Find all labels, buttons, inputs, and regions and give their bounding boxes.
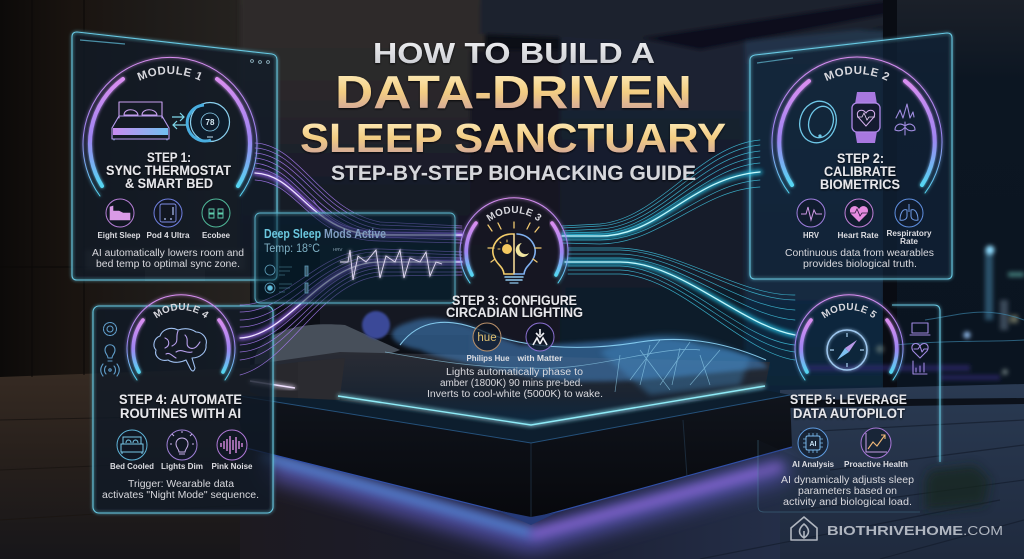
flow lines: purple from modules 1 and 4 [240,143,462,375]
headboard [320,245,500,335]
description: activity and biological load. [783,497,912,508]
description [92,248,244,270]
description: AI dynamically adjusts sleep [781,475,914,486]
item: Pod 4 Ultra [146,199,190,240]
module label: MODULE 2 [824,66,890,81]
module label: MODULE 3 [486,206,542,222]
item: AI Analysis: AI [810,441,817,448]
item: HRV: HRV [803,231,820,240]
title line 2: DATA-DRIVEN [335,66,692,118]
panel: module 1 [68,29,280,283]
under-bed glow [265,452,790,552]
step heading [106,150,232,191]
description: bed temp to optimal sync zone. [96,259,240,270]
glass frame [892,305,940,462]
panel: module 2 [747,30,955,282]
item: Eight Sleep: Eight Sleep [98,231,141,240]
step heading: CALIBRATE [824,164,896,179]
step heading: STEP 4: AUTOMATE [119,392,242,407]
progress arc [460,198,568,283]
item: Philips Hue [466,323,510,363]
status rows [265,265,308,293]
description: amber (1800K) 90 mins pre-bed. [440,378,583,389]
icon: thermostat [187,102,230,142]
panel: module 5 [758,292,943,512]
description: activates "Night Mode" sequence. [102,490,259,501]
progress arc [127,295,235,380]
title block [300,38,726,185]
item: Philips Hue: Philips Hue [466,354,510,363]
side icons [101,322,119,376]
description [785,248,934,270]
wordmark: BIOTHRIVEHOME [827,523,963,538]
icon: smart ring [794,96,842,148]
HRV label: HRV [333,247,342,252]
glass frame [93,306,273,513]
module label: MODULE 1 [137,66,202,81]
LED strip [338,386,765,425]
icon: smart bed [112,102,169,140]
icon: thermostat: 78 [206,118,215,127]
side icons [910,323,930,374]
step heading [119,392,242,421]
item: Proactive Health [844,428,908,469]
item: with Matter: with Matter [516,354,562,363]
icon: compass [827,330,867,370]
item: Respiratory Rate: Rate [900,237,919,246]
icon: brain [154,328,206,371]
step heading: CIRCADIAN LIGHTING [446,305,583,320]
item: AI Analysis: AI Analysis [792,460,835,469]
item: Pink Noise [212,430,253,471]
item: Respiratory Rate [886,199,932,246]
domain: .COM [963,523,1003,538]
progress arc [795,295,903,380]
item: Pod 4 Ultra: Pod 4 Ultra [146,231,190,240]
step heading [790,392,907,421]
step heading: & SMART BED [125,176,213,191]
glass frame [72,32,277,280]
item: AI Analysis [792,428,835,469]
panel: module 3 [427,194,603,400]
description [781,475,914,508]
item: Eight Sleep [98,199,141,240]
title line 1: HOW TO BUILD A [373,38,655,70]
step heading: STEP 2: [837,151,884,166]
step heading: SYNC THERMOSTAT [106,163,232,178]
mattress [250,352,770,425]
translucent sleeper [362,311,768,395]
panel: module 4 [90,292,276,516]
description: provides biological truth. [803,259,917,270]
item: Lights Dim: Lights Dim [161,462,203,471]
item: Bed Cooled [110,430,154,471]
description: Inverts to cool-white (5000K) to wake. [427,389,603,400]
flow lines: cyan from modules 2 and 5 [562,140,795,360]
status frame [255,213,455,303]
temperature reading: Temp: 18°C [264,241,320,255]
item: Ecobee [202,199,231,240]
item: Respiratory Rate: Respiratory [886,229,932,238]
bed [233,245,792,552]
step heading [446,293,583,320]
panel: deep sleep status display [255,213,455,303]
icon: sync arrows [172,113,186,129]
description: parameters based on [798,486,897,497]
item: Heart Rate: Heart Rate [838,231,879,240]
icon: circadian bulb [488,222,541,283]
step heading: STEP 3: CONFIGURE [452,293,577,308]
step heading: BIOMETRICS [820,177,900,192]
progress arc [83,57,257,196]
ECG trace [340,250,442,280]
title line 3: SLEEP SANCTUARY [300,115,726,161]
glass frame [750,33,952,279]
brand logo [791,517,1003,540]
bed frame base [233,395,792,519]
item: HRV [797,199,825,240]
module label: MODULE 4 [153,303,209,318]
step heading: ROUTINES WITH AI [120,406,241,421]
description: Continuous data from wearables [785,248,934,259]
item: Proactive Health: Proactive Health [844,460,908,469]
item: with Matter [516,323,562,363]
item: Lights Dim [161,430,203,471]
step heading: STEP 5: LEVERAGE [790,392,907,407]
pillow [255,324,400,368]
progress arc [772,57,942,193]
icon: smart watch [852,92,880,143]
status heading: Deep Sleep Mods Active [264,227,386,241]
item: Heart Rate [838,199,879,240]
description [427,367,603,400]
subtitle: STEP-BY-STEP BIOHACKING GUIDE [331,162,696,185]
item: Philips Hue: hue [477,332,497,344]
step heading: STEP 1: [147,150,191,165]
item: Ecobee: Ecobee [202,231,231,240]
item: Pink Noise: Pink Noise [212,462,253,471]
icon: leaf house [791,517,817,540]
module label: MODULE 5 [821,303,877,318]
description: AI automatically lowers room and [92,248,244,259]
robot vacuum silhouette [925,465,990,510]
description: Lights automatically phase to [446,367,583,378]
blanket fold [298,358,345,412]
step heading: DATA AUTOPILOT [793,406,906,421]
step heading [820,151,900,192]
item: Bed Cooled: Bed Cooled [110,462,154,471]
icon: vitals [895,104,915,135]
description: Trigger: Wearable data [128,479,235,490]
description [102,479,259,501]
